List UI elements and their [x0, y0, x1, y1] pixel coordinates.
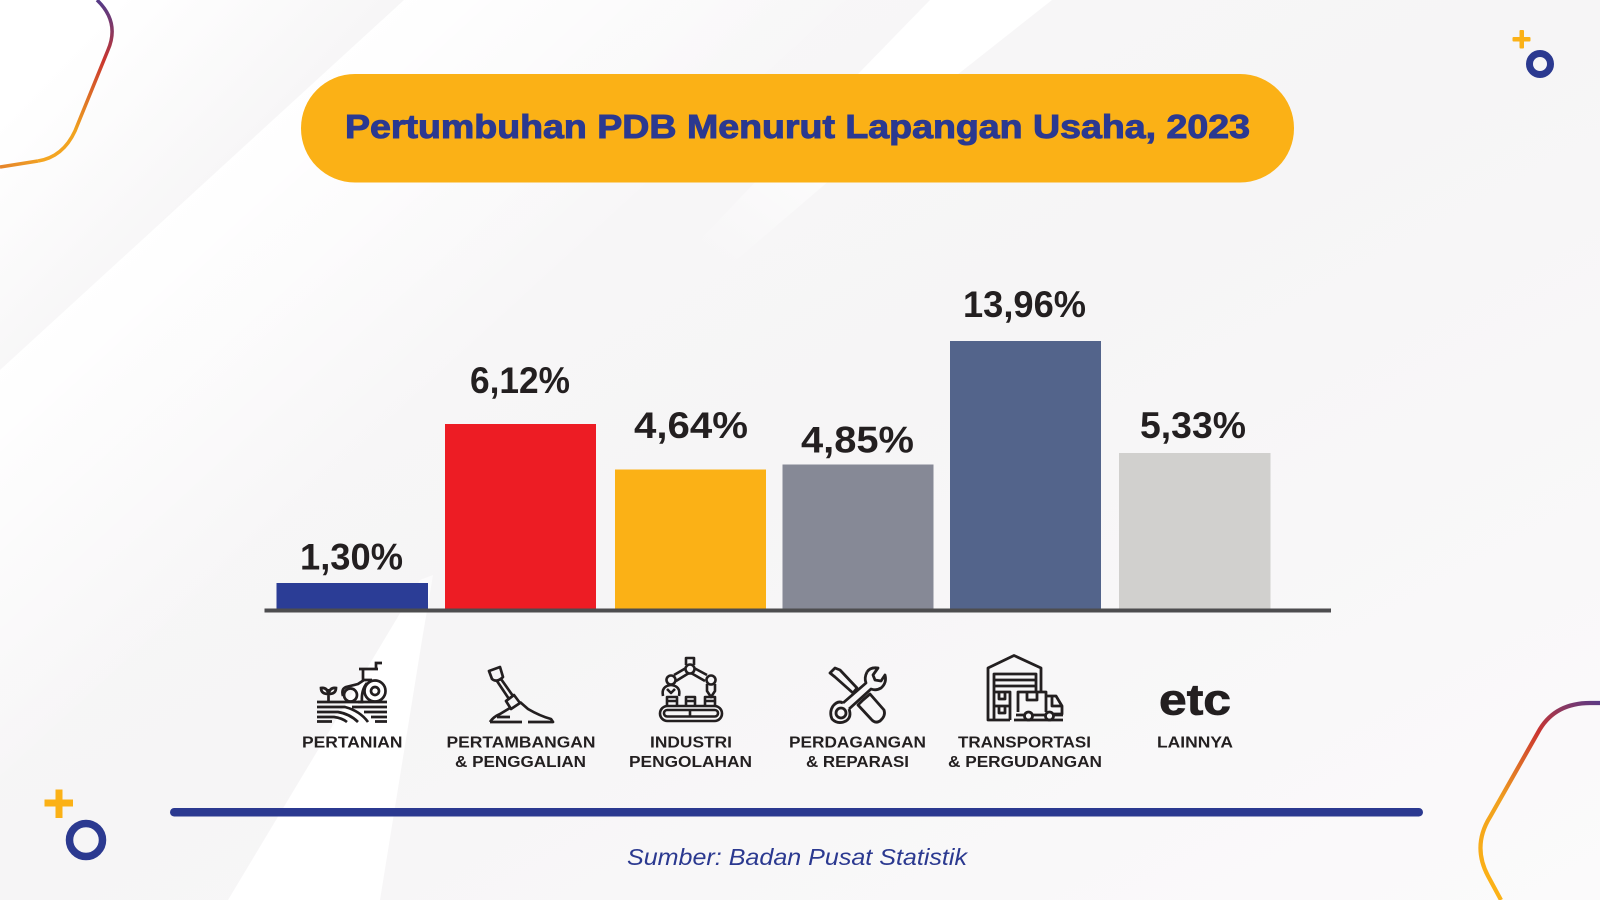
bar: pertanian — [276, 536, 428, 609]
label: pertanian: PERTANIAN — [302, 734, 402, 752]
label: perdagangan dan reparasi: & REPARASI — [806, 754, 909, 771]
label: transportasi dan pergudangan: & PERGUDANGAN — [948, 754, 1102, 771]
bar: pertambangan — [445, 360, 596, 609]
bar: pertambangan: 6,12% — [470, 360, 570, 401]
label: transportasi dan pergudangan: TRANSPORTASI — [958, 734, 1091, 752]
icon: wrench and screwdriver — [830, 668, 886, 723]
label: lainnya: LAINNYA — [1157, 734, 1233, 752]
bar: transportasi — [950, 284, 1101, 609]
icon: etc: etc — [1159, 676, 1231, 724]
label: perdagangan dan reparasi: PERDAGANGAN — [789, 734, 926, 752]
label: pertambangan dan penggalian: PERTAMBANGAN — [446, 734, 596, 752]
title — [301, 74, 1294, 182]
bar: lainnya — [1119, 405, 1270, 609]
decorative curve: top left — [0, 0, 112, 167]
label: perdagangan dan reparasi — [789, 734, 926, 771]
source note: Sumber: Badan Pusat Statistik — [627, 844, 969, 870]
bar: perdagangan — [782, 420, 934, 609]
icon: warehouse and truck — [988, 656, 1063, 720]
bar: industri: 4,64% — [634, 405, 748, 446]
label: industri pengolahan: PENGOLAHAN — [629, 754, 752, 771]
bar: industri — [615, 405, 766, 609]
bar: pertanian: 1,30% — [300, 536, 403, 578]
icon: plus and ring bottom left — [44, 790, 102, 856]
axis — [264, 608, 1331, 612]
bar: perdagangan: 4,85% — [801, 420, 914, 460]
bar: lainnya: 5,33% — [1140, 405, 1246, 446]
icon: plus and ring top right — [1512, 30, 1550, 74]
icon: shovel on mound — [489, 667, 553, 722]
icon: robot arm — [660, 658, 722, 721]
decorative curve: bottom right — [1480, 703, 1600, 900]
icon: tractor — [317, 663, 387, 722]
label: industri pengolahan — [629, 734, 752, 771]
title: Pertumbuhan PDB Menurut Lapangan Usaha, 2023 — [345, 108, 1250, 145]
bar chart — [264, 284, 1331, 612]
bar: transportasi: 13,96% — [963, 284, 1086, 325]
label: pertambangan dan penggalian: & PENGGALIAN — [455, 754, 586, 771]
footer rule — [170, 808, 1423, 816]
label: pertambangan dan penggalian — [446, 734, 596, 771]
label: industri pengolahan: INDUSTRI — [650, 734, 732, 752]
label: transportasi dan pergudangan — [948, 734, 1102, 771]
